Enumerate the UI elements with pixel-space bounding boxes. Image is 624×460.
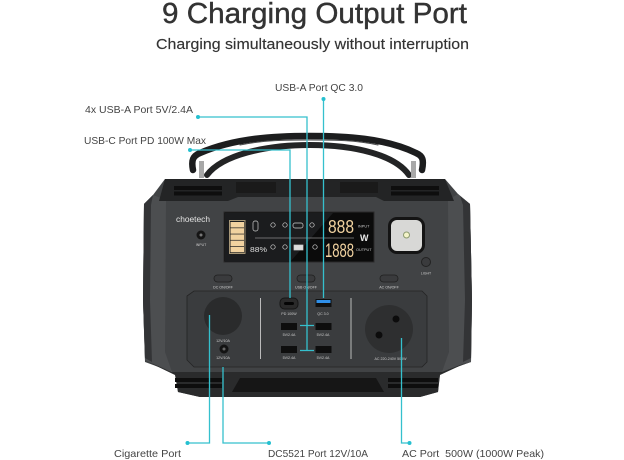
- status percentage: 88%: [250, 245, 267, 254]
- AC socket: [365, 305, 413, 361]
- DC5521 port: [216, 344, 230, 360]
- line: cigarette port: [187, 315, 210, 443]
- top dark band: [159, 179, 454, 201]
- USB-C port: [280, 298, 298, 316]
- callout lines: [187, 99, 409, 443]
- light button: [421, 258, 432, 276]
- input port: INPUT: [196, 243, 207, 247]
- USB-C port: PD 100W: [281, 312, 297, 316]
- line: AC port: [402, 338, 409, 443]
- USB-A ports: 5V/2.4A: [317, 333, 330, 337]
- right side bumper: [442, 194, 472, 372]
- cigarette port: 12V/10A: [216, 339, 230, 343]
- callout labels: Cigarette Port: [114, 448, 181, 460]
- power station product illustration: [143, 136, 472, 397]
- line: USB-A QC 3.0: [322, 99, 324, 298]
- line: USB-C: [190, 150, 290, 298]
- USB-A ports: 5V/2.4A: [283, 356, 296, 360]
- vents: [174, 182, 439, 392]
- USB-A QC port: QC 3.0: [317, 312, 329, 316]
- button labels: [213, 286, 400, 290]
- USB-A ports: 5V/2.4A: [283, 333, 296, 337]
- callout labels: 4x USB-A Port 5V/2.4A: [85, 104, 193, 116]
- callout labels: USB-C Port PD 100W Max: [84, 135, 207, 147]
- AC socket: AC 220-240V 500W: [375, 357, 407, 361]
- cigarette port: [204, 297, 242, 343]
- LED light: [388, 217, 425, 254]
- DC5521 port: 12V/10A: [216, 356, 230, 360]
- power buttons: [214, 275, 398, 282]
- main body: [143, 179, 472, 397]
- carrying handle: [192, 136, 423, 178]
- USB-A ports: 5V/2.4A: [317, 356, 330, 360]
- watt unit: W: [360, 233, 369, 243]
- brand logo: choetech: [176, 215, 210, 224]
- USB-A ports: [281, 323, 332, 360]
- subtitle: Charging simultaneously without interruption: [156, 37, 469, 53]
- LCD display: [224, 212, 374, 262]
- battery indicator: [230, 220, 245, 254]
- input label: INPUT: [358, 224, 370, 228]
- callout labels: DC5521 Port 12V/10A: [268, 448, 368, 460]
- left side bumper: [143, 195, 172, 372]
- button labels: AC ON/OFF: [379, 286, 400, 290]
- button labels: USB ON/OFF: [295, 286, 318, 290]
- output wattage digits: 1888: [325, 240, 354, 262]
- callout labels: AC Port 500W (1000W Peak): [402, 448, 544, 460]
- callout labels: USB-A Port QC 3.0: [275, 82, 363, 94]
- port panel: [187, 291, 427, 367]
- button labels: DC ON/OFF: [213, 286, 234, 290]
- line: 4x USB-A: [198, 117, 314, 350]
- input port: [196, 230, 207, 247]
- light button: LIGHT: [421, 272, 432, 276]
- callout labels: [84, 82, 544, 460]
- status icons: [253, 221, 354, 250]
- panel dividers: [260, 298, 351, 359]
- line: DC5521 port: [223, 367, 269, 443]
- input wattage digits: 888: [328, 216, 354, 237]
- output label: OUTPUT: [356, 248, 372, 252]
- bottom dark band: [148, 362, 468, 397]
- USB-A QC port: [316, 299, 332, 316]
- callout dots: [186, 97, 412, 445]
